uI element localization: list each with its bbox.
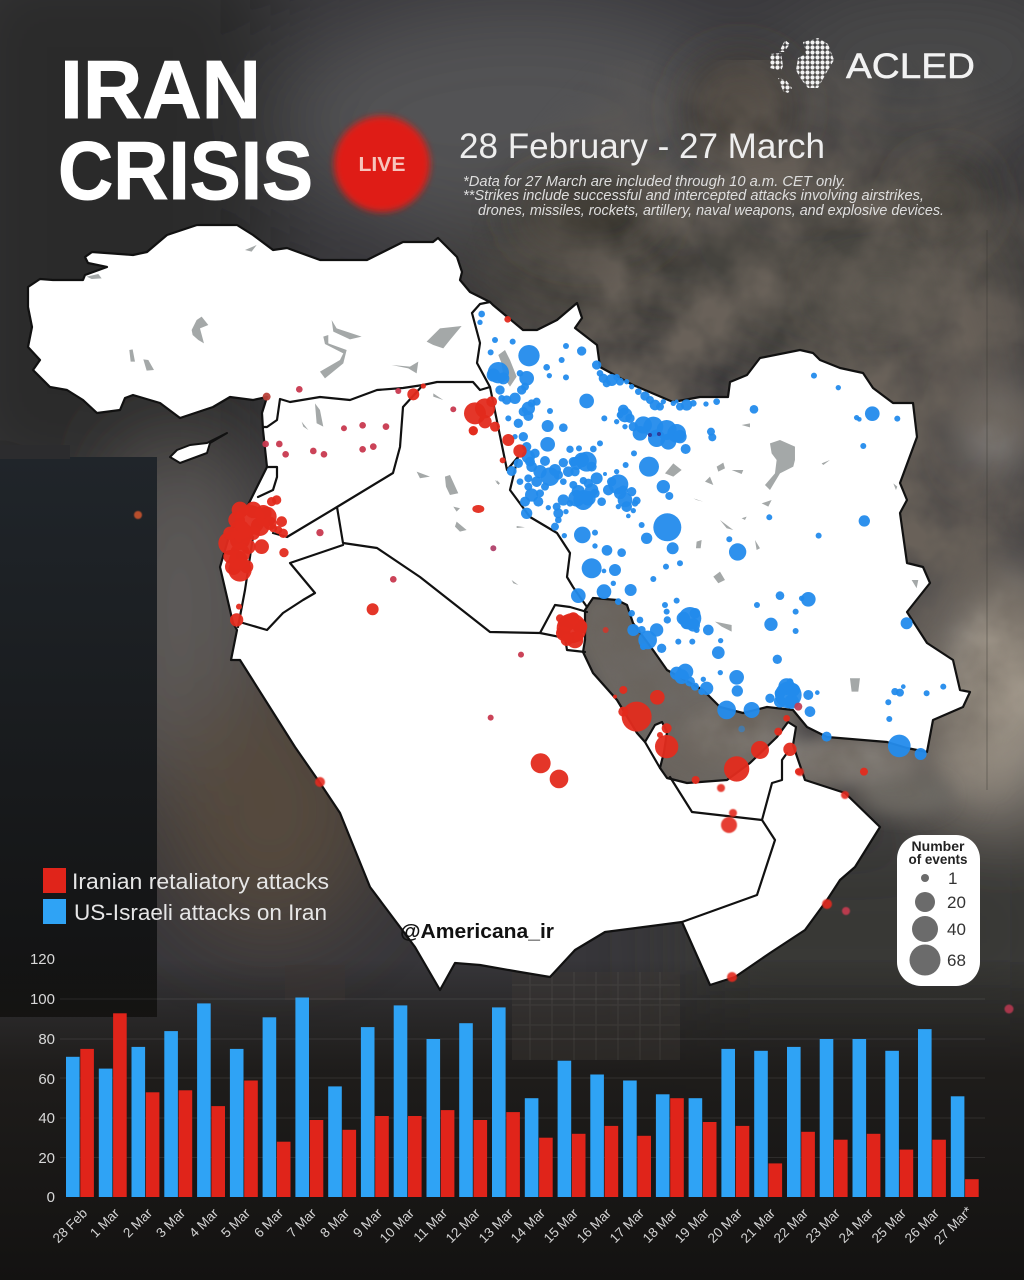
x axis date labels: 9 Mar bbox=[350, 1205, 385, 1241]
live badge: LIVE bbox=[358, 154, 406, 176]
red dots: Levant and Syria bbox=[218, 383, 478, 627]
x axis date labels: 26 Mar bbox=[902, 1205, 942, 1246]
x axis date labels: 14 Mar bbox=[508, 1205, 548, 1246]
y axis labels bbox=[30, 951, 55, 1206]
bar chart: daily events bbox=[30, 951, 985, 1248]
x axis date labels: 11 Mar bbox=[411, 1205, 450, 1245]
legend: US-Israeli attacks: US-Israeli attacks on Iran bbox=[74, 900, 327, 925]
x axis date labels: 25 Mar bbox=[869, 1205, 909, 1246]
date range: 28 February - 27 March bbox=[459, 127, 825, 166]
gridlines bbox=[60, 999, 985, 1158]
y axis labels: 120 bbox=[30, 951, 55, 968]
x axis date labels: 8 Mar bbox=[317, 1205, 352, 1241]
y axis labels: 40 bbox=[38, 1110, 55, 1127]
x axis date labels: 22 Mar bbox=[771, 1205, 811, 1246]
ACLED logo: ACLED bbox=[846, 47, 975, 86]
x axis date labels: 28 Feb bbox=[50, 1206, 90, 1246]
red dots: Iranian attacks, Iraq and Gulf bbox=[464, 316, 868, 788]
x axis date labels: 10 Mar bbox=[377, 1205, 417, 1246]
Cyprus bbox=[170, 433, 227, 463]
map of the Middle East bbox=[28, 225, 1014, 1014]
size legend: number of events: 68 bbox=[947, 951, 966, 970]
x axis date labels: 20 Mar bbox=[705, 1205, 745, 1246]
size legend: number of events: 20 bbox=[947, 893, 966, 912]
x axis date labels: 21 Mar bbox=[738, 1205, 778, 1246]
x axis date labels: 19 Mar bbox=[672, 1205, 712, 1246]
blue dots: US-Israeli attacks bbox=[477, 311, 946, 760]
title: IRAN bbox=[60, 43, 261, 136]
footnotes: *Data for 27 March are included through 10 a.m. CET only. bbox=[463, 174, 846, 190]
size legend: number of events: of events bbox=[908, 851, 968, 867]
footnotes bbox=[463, 174, 944, 219]
lakes: Turkey and Iraq bbox=[87, 245, 500, 532]
x axis date labels: 5 Mar bbox=[218, 1205, 253, 1241]
ACLED logo bbox=[770, 38, 975, 93]
y axis labels: 80 bbox=[38, 1031, 55, 1048]
y axis labels: 60 bbox=[38, 1071, 55, 1088]
x axis date labels: 3 Mar bbox=[153, 1205, 188, 1241]
size legend: number of events: 1 bbox=[948, 869, 957, 888]
x axis date labels: 13 Mar bbox=[476, 1205, 516, 1246]
legend: Iranian attacks: Iranian retaliatory attacks bbox=[72, 869, 329, 894]
color legend bbox=[43, 868, 329, 925]
footnotes: **Strikes include successful and intercepted attacks involving airstrikes, bbox=[463, 188, 924, 204]
x axis date labels: 7 Mar bbox=[284, 1205, 319, 1241]
x axis date labels: 23 Mar bbox=[803, 1205, 843, 1246]
x axis date labels: 27 Mar* bbox=[931, 1203, 976, 1248]
x axis date labels: 12 Mar bbox=[443, 1205, 483, 1246]
land mass bbox=[28, 225, 970, 990]
footnotes: drones, missiles, rockets, artillery, naval weapons, and explosive devices. bbox=[478, 203, 944, 219]
title bbox=[58, 43, 313, 217]
x axis date labels: 6 Mar bbox=[251, 1205, 286, 1241]
size legend: number of events: 40 bbox=[947, 920, 966, 939]
size legend: number of events bbox=[897, 835, 980, 986]
x axis date labels: 16 Mar bbox=[574, 1205, 614, 1246]
x axis date labels: 15 Mar bbox=[541, 1205, 581, 1246]
country borders bbox=[238, 302, 787, 922]
red dots: Arabian Peninsula and outliers bbox=[134, 511, 1014, 1014]
x axis date labels: 2 Mar bbox=[120, 1205, 155, 1241]
y axis labels: 20 bbox=[38, 1150, 55, 1167]
x axis date labels: 18 Mar bbox=[640, 1205, 680, 1246]
red bars: Iranian retaliatory attacks bbox=[80, 1013, 979, 1197]
blue bars: US-Israeli attacks bbox=[66, 998, 964, 1197]
x axis date labels: 4 Mar bbox=[186, 1205, 221, 1241]
x axis date labels bbox=[50, 1203, 976, 1248]
size legend: number of events: Number bbox=[912, 838, 965, 854]
lakes: Iran bbox=[495, 350, 918, 692]
y axis labels: 100 bbox=[30, 991, 55, 1008]
title: CRISIS bbox=[58, 124, 313, 217]
watermark: @Americana_ir bbox=[400, 921, 554, 943]
x axis date labels: 24 Mar bbox=[836, 1205, 876, 1246]
y axis labels: 0 bbox=[47, 1189, 55, 1206]
live badge bbox=[334, 116, 430, 212]
x axis date labels: 17 Mar bbox=[607, 1205, 647, 1246]
x axis date labels: 1 Mar bbox=[87, 1205, 122, 1241]
Gulf water tint bbox=[570, 590, 950, 815]
